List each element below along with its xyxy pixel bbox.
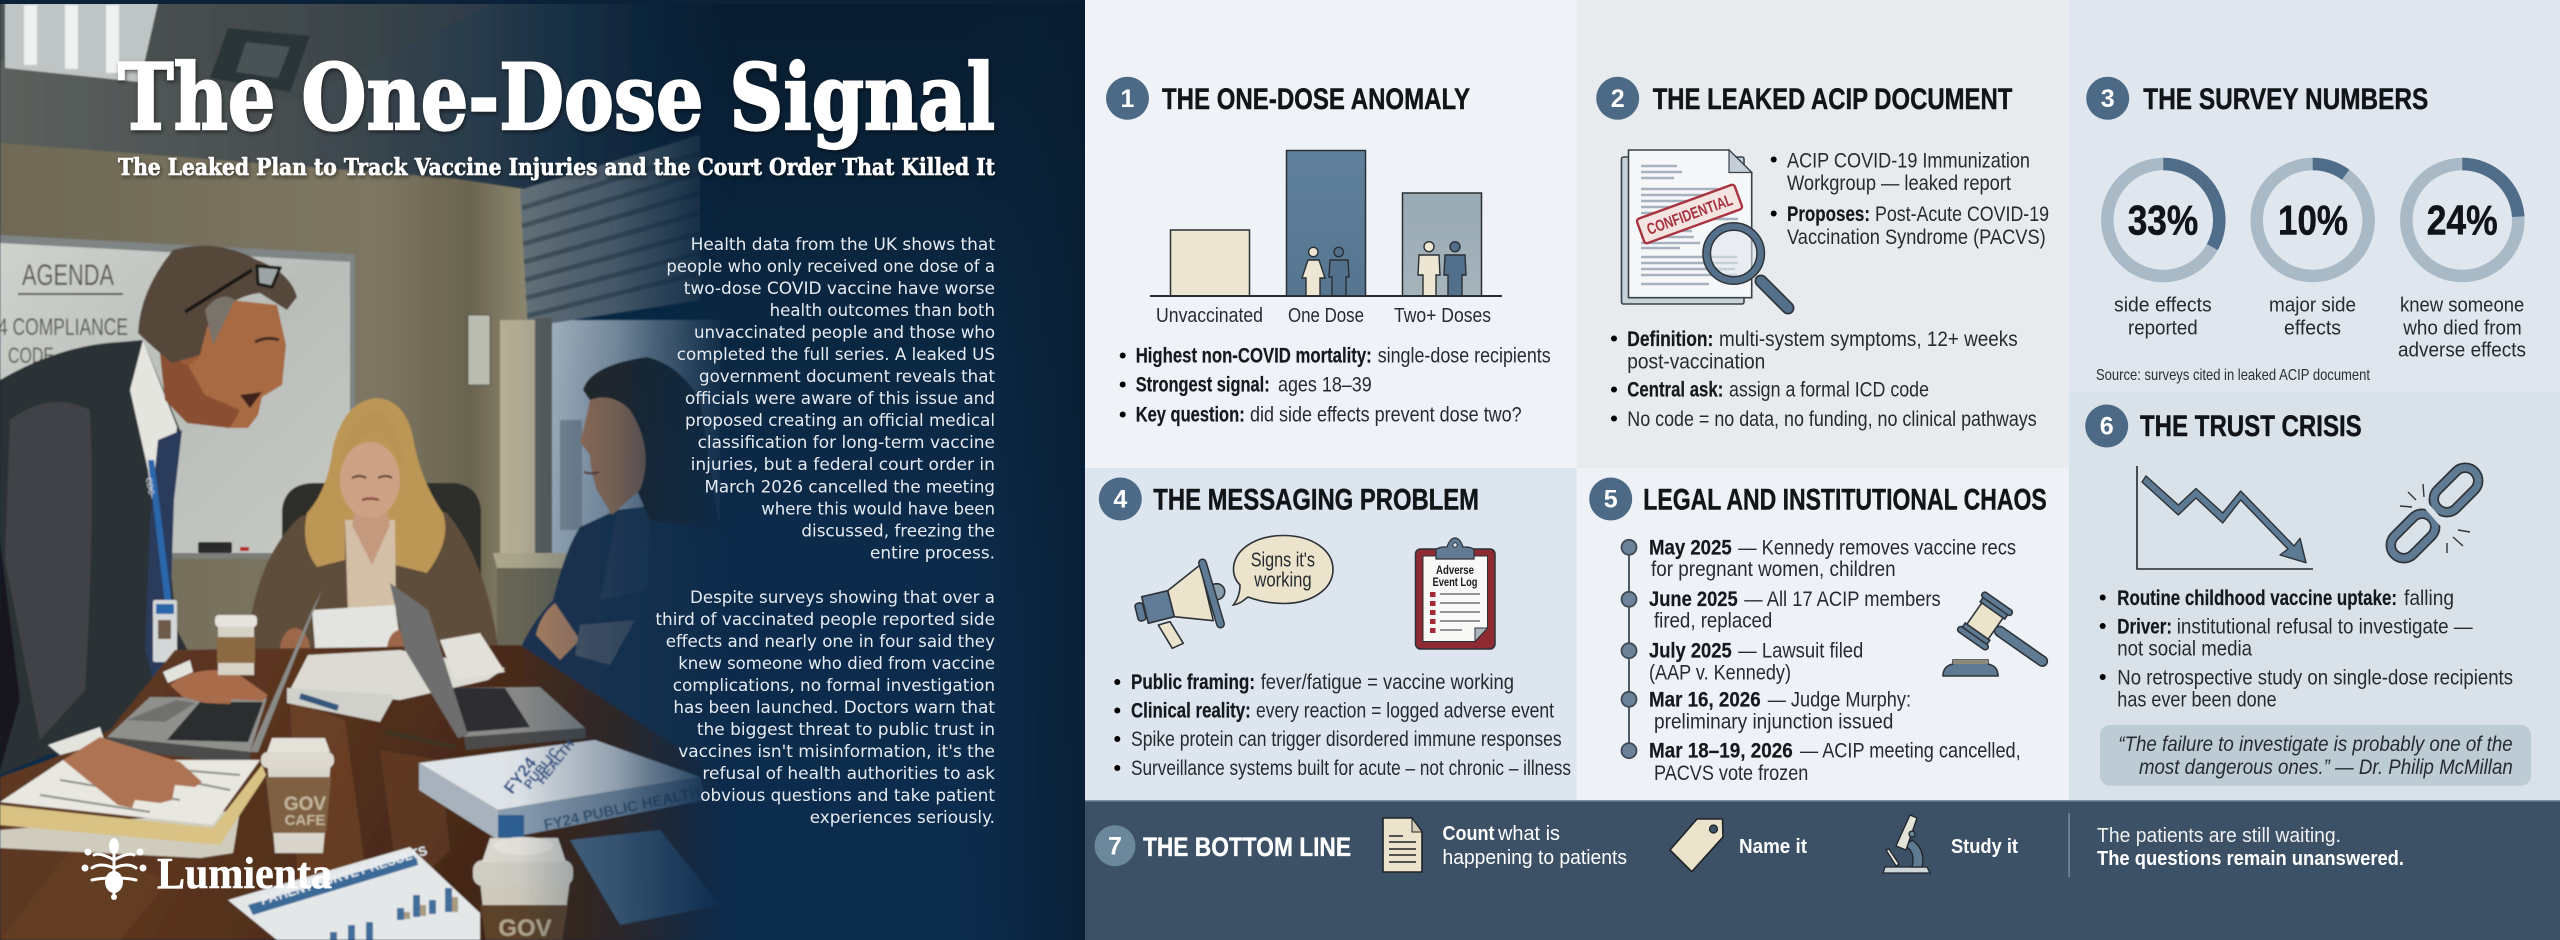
timeline: June 2025 xyxy=(1649,588,1738,611)
donut: 33 percent: side effects xyxy=(2114,294,2212,317)
summary paragraph 2: has been launched. Doctors warn that xyxy=(673,698,995,718)
icon: megaphone xyxy=(1134,563,1225,648)
bullet list 1 xyxy=(1120,345,1551,427)
bullet list 6: not social media xyxy=(2117,638,2252,661)
bullet list 4: every reaction = logged adverse event xyxy=(1256,700,1554,723)
survey report xyxy=(228,843,480,940)
bullet list 6: Driver: xyxy=(2117,615,2172,638)
closing message xyxy=(2097,825,2404,870)
icon: microscope xyxy=(1883,815,1930,873)
panel 7: the bottom line xyxy=(1085,800,2560,940)
panel 6: the trust crisis xyxy=(2069,392,2560,802)
office scene illustration: 4 COMPLIANCE xyxy=(0,314,128,341)
summary paragraph 2: the biggest threat to public trust in xyxy=(697,720,995,740)
icon: adverse event clipboard xyxy=(1416,538,1495,649)
donut: 24 percent: adverse effects xyxy=(2398,339,2526,362)
summary paragraph 1: officials were aware of this issue and xyxy=(685,389,995,409)
paper stack xyxy=(0,810,240,858)
summary paragraph 1: classification for long-term vaccine xyxy=(698,433,995,453)
summary paragraph 2: Despite surveys showing that over a xyxy=(690,588,995,608)
bullet list 6: has ever been done xyxy=(2117,689,2277,712)
callout: McMillan quote xyxy=(2100,725,2531,786)
speech bubble: signs it's working xyxy=(1233,536,1333,605)
callout: McMillan quote: “The failure to investigate is probably one of the xyxy=(2118,733,2513,756)
bullet list 6: Routine childhood vaccine uptake: xyxy=(2117,587,2397,610)
callout: McMillan quote: most dangerous ones.” — Dr. Philip McMillan xyxy=(2139,756,2513,779)
panel 4: the messaging problem xyxy=(1085,468,1577,802)
bullet list 2 bottom: No code = no data, no funding, no clinical pathways xyxy=(1627,408,2037,431)
closing message: The patients are still waiting. xyxy=(2097,825,2341,847)
timeline: — ACIP meeting cancelled, xyxy=(1800,740,2021,763)
summary paragraph 1: completed the full series. A leaked US xyxy=(677,345,995,365)
badge 2 xyxy=(1596,77,1639,120)
office scene illustration: CDC xyxy=(144,477,156,496)
summary paragraph 2: experiences seriously. xyxy=(810,808,995,828)
donut: 10 percent: major side xyxy=(2269,294,2356,317)
panel 1: the one-dose anomaly xyxy=(1085,0,1577,470)
step: count: what is xyxy=(1497,823,1560,845)
badge 1 xyxy=(1106,77,1149,120)
bullet list 2 bottom: Definition: xyxy=(1627,328,1713,351)
timeline xyxy=(1622,536,2021,785)
man suit xyxy=(0,340,190,775)
survey report: PATIENT SURVEY RESULTS xyxy=(258,843,429,908)
bar chart: One Dose xyxy=(1288,304,1364,327)
bullet list 6: institutional refusal to investigate — xyxy=(2177,615,2473,638)
badge 6 xyxy=(2085,404,2128,448)
summary paragraph 1: injuries, but a federal court order in xyxy=(691,455,995,475)
pens xyxy=(300,696,338,708)
heading 6: THE TRUST CRISIS xyxy=(2140,410,2362,443)
bullet list 1: single-dose recipients xyxy=(1378,345,1551,368)
summary paragraph 2: vaccines isn't misinformation, it's the xyxy=(678,742,995,762)
bullet list 4: Surveillance systems built for acute – not chronic – illness xyxy=(1131,757,1571,780)
badge 6: 6 xyxy=(2100,413,2114,441)
timeline: Mar 16, 2026 xyxy=(1649,689,1761,712)
timeline: Mar 18–19, 2026 xyxy=(1649,740,1793,763)
icon: confidential document and magnifier xyxy=(1622,150,1788,308)
papers centre xyxy=(290,650,505,700)
donut: 33 percent xyxy=(2107,164,2219,339)
badge 7: 7 xyxy=(1108,832,1122,860)
icon: confidential document and magnifier: CONFIDENTIAL xyxy=(1645,192,1735,239)
bar chart: Two+ Doses xyxy=(1394,304,1491,327)
donut: 10 percent xyxy=(2257,164,2369,339)
binder: HEALTH xyxy=(534,737,577,787)
icon: tag xyxy=(1670,819,1723,872)
bullet list 2 top xyxy=(1771,149,2049,249)
bullet list 2 bottom: Central ask: xyxy=(1627,379,1723,402)
heading 7: THE BOTTOM LINE xyxy=(1143,832,1351,862)
bullet list 2 top: Vaccination Syndrome (PACVS) xyxy=(1787,226,2046,249)
bullet list 1: did side effects prevent dose two? xyxy=(1250,404,1522,427)
summary paragraph 2: knew someone who died from vaccine xyxy=(678,654,995,674)
timeline: — Kennedy removes vaccine recs xyxy=(1738,536,2016,559)
woman centre xyxy=(251,512,498,650)
timeline: — Lawsuit filed xyxy=(1738,640,1863,663)
binder: PUBLIC xyxy=(521,744,563,792)
table xyxy=(0,645,720,940)
timeline: preliminary injunction issued xyxy=(1654,710,1893,733)
badge 3: 3 xyxy=(2101,85,2115,113)
step: name: Name it xyxy=(1739,836,1807,858)
panel 2: the leaked ACIP document xyxy=(1577,0,2070,470)
logo: Lumienta xyxy=(83,838,332,900)
bullet list 4 xyxy=(1114,671,1571,780)
panel 3: the survey numbers xyxy=(2069,0,2560,394)
bar chart xyxy=(1150,150,1502,327)
bullet list 4: Clinical reality: xyxy=(1131,700,1251,723)
office scene illustration xyxy=(0,0,760,940)
donut: 33 percent: 33% xyxy=(2128,196,2198,243)
summary paragraph 1: entire process. xyxy=(870,544,995,564)
summary paragraph 1: two-dose COVID vaccine have worse xyxy=(684,279,995,299)
summary paragraph 1: discussed, freezing the xyxy=(801,522,995,542)
badge 5: 5 xyxy=(1604,486,1618,514)
panel 5: legal and institutional chaos xyxy=(1577,468,2069,802)
panel: hero illustration with summary xyxy=(0,0,1085,940)
speech bubble: signs it's working: Signs it's xyxy=(1251,549,1315,572)
donut: 24 percent xyxy=(2398,164,2526,362)
office scene illustration: CODE xyxy=(8,343,54,368)
summary paragraph 2: complications, no formal investigation xyxy=(673,676,995,696)
bullet list 2 bottom: post-vaccination xyxy=(1627,350,1765,373)
icon: adverse event clipboard: Event Log xyxy=(1432,577,1478,589)
badge 3 xyxy=(2086,77,2129,120)
binder xyxy=(419,737,705,840)
donut: 24 percent: knew someone xyxy=(2400,294,2524,317)
cup small xyxy=(215,615,257,675)
badge 2: 2 xyxy=(1611,85,1625,113)
timeline: — Judge Murphy: xyxy=(1768,689,1911,712)
step: count: happening to patients xyxy=(1442,847,1627,869)
timeline: — All 17 ACIP members xyxy=(1744,588,1941,611)
summary paragraph 2 xyxy=(655,588,995,828)
badge 4 xyxy=(1099,478,1142,520)
bullet list 2 top: Proposes: xyxy=(1787,203,1870,226)
man cuffs and hands xyxy=(163,660,193,683)
heading 1: THE ONE-DOSE ANOMALY xyxy=(1162,83,1470,116)
timeline: for pregnant women, children xyxy=(1651,558,1896,581)
bullet list 4: Spike protein can trigger disordered immune responses xyxy=(1131,728,1562,751)
donut: 33 percent: reported xyxy=(2128,316,2198,339)
bullet list 6: No retrospective study on single-dose recipients xyxy=(2117,666,2513,689)
summary paragraph 1: people who only received one dose of a xyxy=(666,257,995,277)
summary paragraph 2: obvious questions and take patient xyxy=(700,786,995,806)
summary paragraph 1: March 2026 cancelled the meeting xyxy=(704,478,995,498)
bullet list 4: fever/fatigue = vaccine working xyxy=(1261,671,1514,694)
timeline: (AAP v. Kennedy) xyxy=(1649,661,1791,684)
cup large with sleeve: CAFE xyxy=(285,812,325,829)
laptop left xyxy=(107,697,267,752)
step: study: Study it xyxy=(1951,836,2018,858)
heading 3: THE SURVEY NUMBERS xyxy=(2143,83,2428,116)
summary paragraph 1: unvaccinated people and those who xyxy=(694,323,995,343)
bullet list 2 bottom xyxy=(1611,328,2037,431)
bullet list 1: ages 18–39 xyxy=(1278,374,1372,397)
binder: FY24 PUBLIC HEALTH xyxy=(542,784,702,834)
blinds and window xyxy=(540,320,720,560)
summary paragraph 1: Health data from the UK shows that xyxy=(691,235,995,255)
bullet list 6 xyxy=(2100,587,2513,712)
bullet list 1: Highest non-COVID mortality: xyxy=(1136,345,1372,368)
bullet list 1: Strongest signal: xyxy=(1136,374,1270,397)
summary paragraph 1: where this would have been xyxy=(761,500,995,520)
dim papers right xyxy=(570,830,720,925)
summary paragraph 1: health outcomes than both xyxy=(770,301,995,321)
summary paragraph 1 xyxy=(666,235,995,564)
donut: 10 percent: effects xyxy=(2284,316,2341,339)
chair xyxy=(281,482,482,574)
icon: document xyxy=(1383,818,1422,872)
timeline: fired, replaced xyxy=(1654,609,1772,632)
title: The One-Dose Signal xyxy=(118,45,995,151)
cup large with sleeve: GOV xyxy=(284,794,326,815)
bullet list 2 top: Post-Acute COVID-19 xyxy=(1875,203,2049,226)
laptop right xyxy=(450,687,585,737)
summary paragraph 1: government document reveals that xyxy=(699,367,995,387)
bullet list 2 top: Workgroup — leaked report xyxy=(1787,172,2011,195)
heading 2: THE LEAKED ACIP DOCUMENT xyxy=(1653,83,2012,116)
speech bubble: signs it's working: working xyxy=(1253,569,1312,592)
bullet list 2 bottom: multi-system symptoms, 12+ weeks xyxy=(1719,328,2018,351)
badge 5 xyxy=(1589,478,1632,520)
right woman xyxy=(521,508,717,738)
whiteboard xyxy=(0,238,353,555)
logo: Lumienta: Lumienta xyxy=(157,849,332,898)
donut: 10 percent: 10% xyxy=(2278,196,2348,243)
chart: falling trend arrow xyxy=(2137,466,2313,569)
heading 4: THE MESSAGING PROBLEM xyxy=(1153,483,1479,516)
timeline: July 2025 xyxy=(1649,640,1732,663)
bullet list 6: falling xyxy=(2404,587,2454,610)
cup front xyxy=(473,837,573,940)
heading 5: LEGAL AND INSTITUTIONAL CHAOS xyxy=(1643,483,2047,516)
step: count: Count xyxy=(1442,823,1495,845)
bullet list 2 bottom: assign a formal ICD code xyxy=(1729,379,1929,402)
icon: adverse event clipboard: Adverse xyxy=(1436,565,1474,577)
subtitle: The Leaked Plan to Track Vaccine Injuries and the Court Order That Killed It xyxy=(118,154,995,181)
office scene illustration: AGENDA xyxy=(22,259,114,292)
icon: gavel xyxy=(1943,591,2060,684)
bar chart: Unvaccinated xyxy=(1156,304,1263,327)
step: count xyxy=(1442,823,1627,869)
bullet list 2 top: ACIP COVID-19 Immunization xyxy=(1787,149,2030,172)
timeline: May 2025 xyxy=(1649,536,1732,559)
donut: 24 percent: who died from xyxy=(2402,316,2522,339)
cup large with sleeve xyxy=(261,738,334,853)
source note: Source: surveys cited in leaked ACIP document xyxy=(2096,367,2370,384)
bullet list 4: Public framing: xyxy=(1131,671,1255,694)
badge 1: 1 xyxy=(1121,85,1135,113)
summary paragraph 2: effects and nearly one in four said they xyxy=(666,632,995,652)
badge 4: 4 xyxy=(1113,486,1127,514)
summary paragraph 2: refusal of health authorities to ask xyxy=(702,764,995,784)
donut: 24 percent: 24% xyxy=(2427,196,2498,243)
icon: broken chain link xyxy=(2385,462,2484,564)
badge 7 xyxy=(1094,825,1136,866)
bullet list 1: Key question: xyxy=(1136,404,1245,427)
binder: FY24 xyxy=(500,753,541,797)
timeline: PACVS vote frozen xyxy=(1654,762,1808,785)
summary paragraph 1: proposed creating an official medical xyxy=(685,411,995,431)
closing message: The questions remain unanswered. xyxy=(2097,848,2404,870)
summary paragraph 2: third of vaccinated people reported side xyxy=(655,610,995,630)
